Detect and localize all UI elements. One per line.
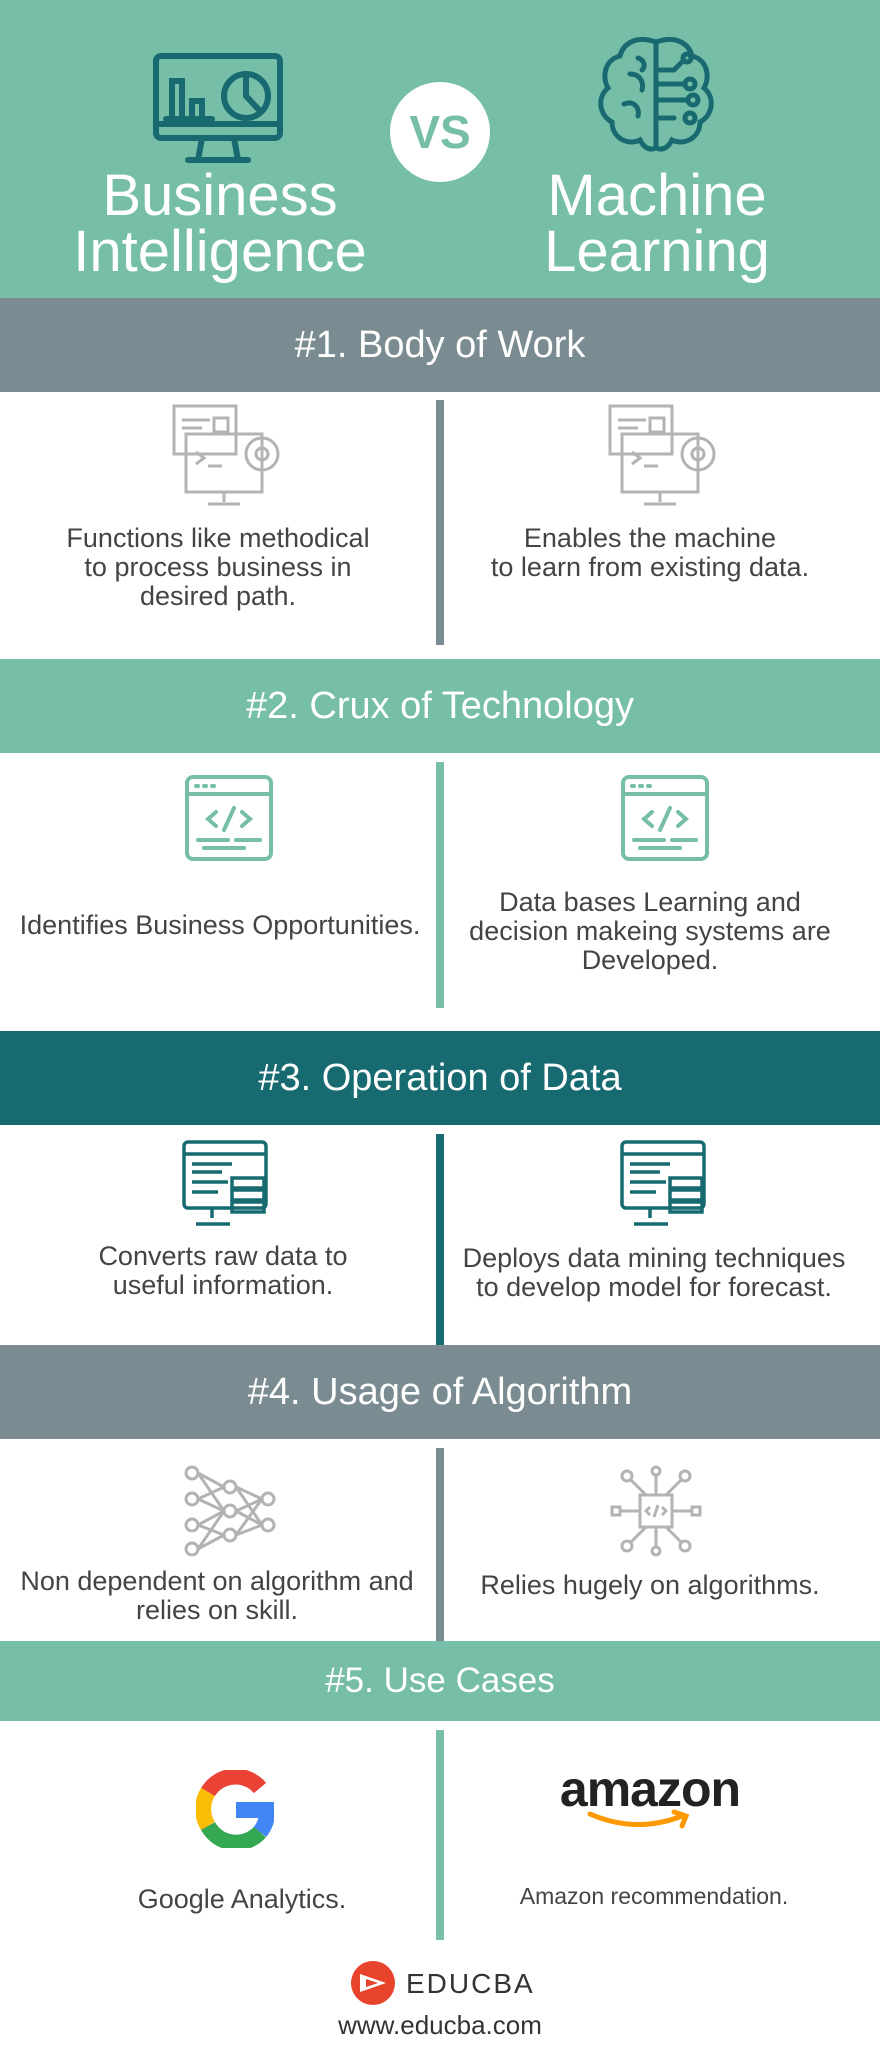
section bar 1: #1. Body of Work [295, 324, 585, 366]
text 2 right: Developed. [582, 945, 718, 975]
section bar 2 [0, 659, 880, 753]
title right [544, 163, 770, 284]
text 3 left: useful information. [113, 1270, 333, 1300]
text 5 right: Amazon recommendation. [520, 1883, 788, 1909]
icon: algorithm chip [610, 1466, 702, 1556]
title right: Machine [547, 163, 767, 228]
icon: neural network [184, 1466, 276, 1556]
text 3 left: Converts raw data to [98, 1241, 348, 1271]
title left [73, 163, 367, 284]
VS circle [390, 82, 490, 182]
icon: server code right [620, 1140, 706, 1226]
text 1 left: desired path. [140, 581, 296, 611]
text 2 left: Identifies Business Opportunities. [20, 910, 420, 940]
VS circle: VS [409, 106, 471, 158]
icon: code window right [621, 775, 709, 861]
text 2 right: decision makeing systems are [469, 916, 831, 946]
section bar 1 [0, 298, 880, 392]
section bar 3 [0, 1031, 880, 1125]
section bar 4 [0, 1345, 880, 1439]
text 1 right: Enables the machine [524, 523, 776, 553]
section bar 5 [0, 1641, 880, 1721]
section bar 2: #2. Crux of Technology [246, 685, 634, 727]
text 1 right [491, 523, 809, 582]
text 1 left [66, 523, 370, 611]
footer logo: EDUCBA [406, 1968, 535, 1999]
section bar 5: #5. Use Cases [325, 1661, 555, 1700]
header [0, 0, 880, 298]
icon: dev gear right [608, 404, 716, 506]
section bar 3: #3. Operation of Data [258, 1057, 622, 1099]
text 1 left: Functions like methodical [66, 523, 370, 553]
text 3 left [98, 1241, 348, 1300]
text 2 right: Data bases Learning and [499, 887, 801, 917]
icon: educba [351, 1961, 395, 2005]
title left: Intelligence [73, 219, 367, 284]
footer logo [351, 1961, 535, 2005]
text 5 left: Google Analytics. [138, 1884, 346, 1914]
title left: Business [102, 163, 338, 228]
text 4 left: Non dependent on algorithm and [20, 1566, 414, 1596]
footer url: www.educba.com [338, 2010, 542, 2040]
icon: monitor chart [153, 53, 283, 163]
logo: amazon: amazon [560, 1761, 740, 1817]
text 4 left: relies on skill. [136, 1595, 298, 1625]
text 3 right: Deploys data mining techniques [463, 1243, 845, 1273]
text 3 right [463, 1243, 845, 1302]
icon: brain [598, 36, 714, 152]
icon: google G [196, 1770, 274, 1848]
icon: dev gear left [172, 404, 280, 506]
icon: code window left [185, 775, 273, 861]
text 4 right: Relies hugely on algorithms. [480, 1570, 820, 1600]
text 2 right [469, 887, 831, 975]
text 1 left: to process business in [84, 552, 352, 582]
text 3 right: to develop model for forecast. [476, 1272, 832, 1302]
text 4 left [20, 1566, 414, 1625]
icon: server code left [182, 1140, 268, 1226]
section bar 4: #4. Usage of Algorithm [248, 1371, 632, 1413]
text 1 right: to learn from existing data. [491, 552, 809, 582]
title right: Learning [544, 219, 770, 284]
